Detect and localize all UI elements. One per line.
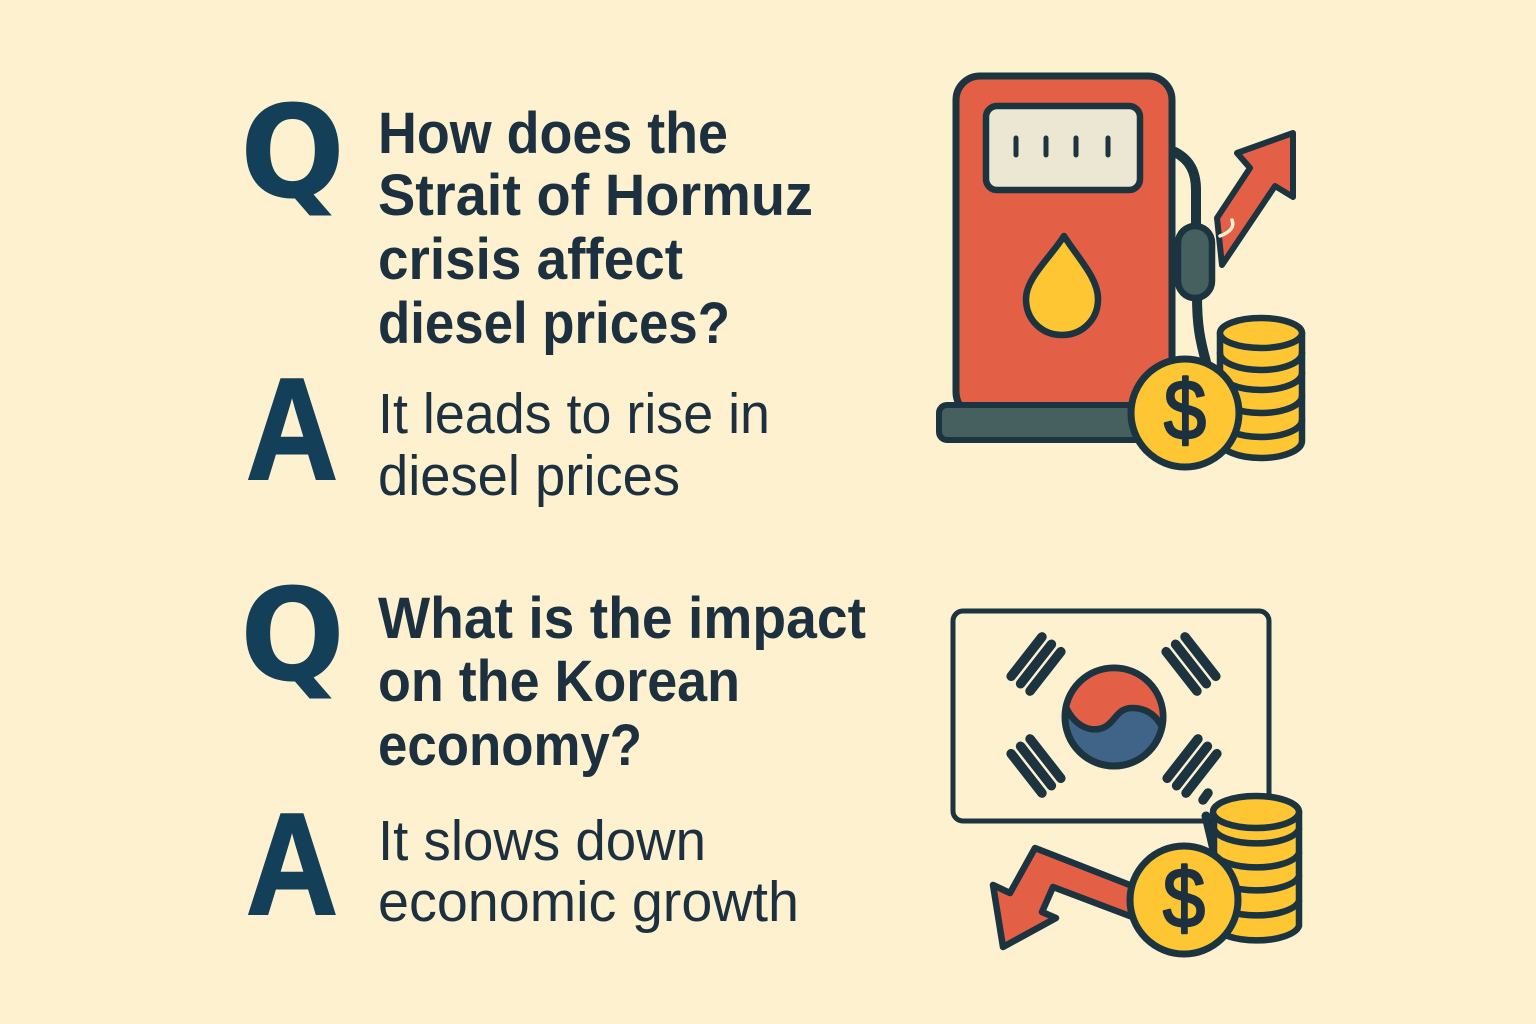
pump screen xyxy=(986,106,1140,190)
section: diesel prices question and answer xyxy=(240,79,813,510)
pump nozzle xyxy=(1178,226,1212,298)
pump base xyxy=(939,405,1169,440)
section: Korean economy question and answer xyxy=(240,562,866,945)
dollar coin xyxy=(1130,846,1238,954)
flag taegeuk xyxy=(1065,668,1163,766)
answer text: Korean economy: It slows down xyxy=(378,809,706,873)
coin stack xyxy=(1206,796,1299,940)
A letter: A xyxy=(246,348,338,510)
question heading: diesel prices xyxy=(378,101,813,356)
question heading: Korean economy: What is the impact xyxy=(378,586,866,651)
question heading: Korean economy: on the Korean xyxy=(378,649,740,714)
answer text: diesel prices xyxy=(378,382,770,508)
rising arrow xyxy=(1217,133,1293,265)
question heading: Korean economy: economy? xyxy=(378,713,642,778)
question heading: diesel prices: How does the xyxy=(378,101,728,166)
dollar coin xyxy=(1131,359,1239,467)
dollar coin: $ xyxy=(1163,851,1205,945)
icon: fuel pump with rising arrow and coins xyxy=(939,76,1302,467)
icon: Korean flag with falling arrow and coins xyxy=(953,611,1299,954)
coin stack xyxy=(1220,318,1302,458)
answer text: diesel prices: diesel prices xyxy=(378,444,680,508)
dollar coin: $ xyxy=(1164,363,1206,457)
flag trigrams xyxy=(1011,637,1217,800)
icon: fuel drop xyxy=(1026,236,1098,335)
Q letter: Q xyxy=(240,562,345,711)
Q letter: Q xyxy=(240,79,345,228)
question heading: Korean economy xyxy=(378,586,866,778)
falling arrow xyxy=(993,848,1135,947)
question heading: diesel prices: diesel prices? xyxy=(378,291,730,356)
answer text: diesel prices: It leads to rise in xyxy=(378,382,770,446)
question heading: diesel prices: crisis affect xyxy=(378,227,683,292)
pump body xyxy=(956,76,1172,416)
flag outline xyxy=(953,611,1269,821)
question heading: diesel prices: Strait of Hormuz xyxy=(378,163,813,228)
A letter: A xyxy=(246,783,338,945)
answer text: Korean economy xyxy=(378,809,799,934)
pump hose xyxy=(1175,152,1206,362)
answer text: Korean economy: economic growth xyxy=(378,870,799,934)
